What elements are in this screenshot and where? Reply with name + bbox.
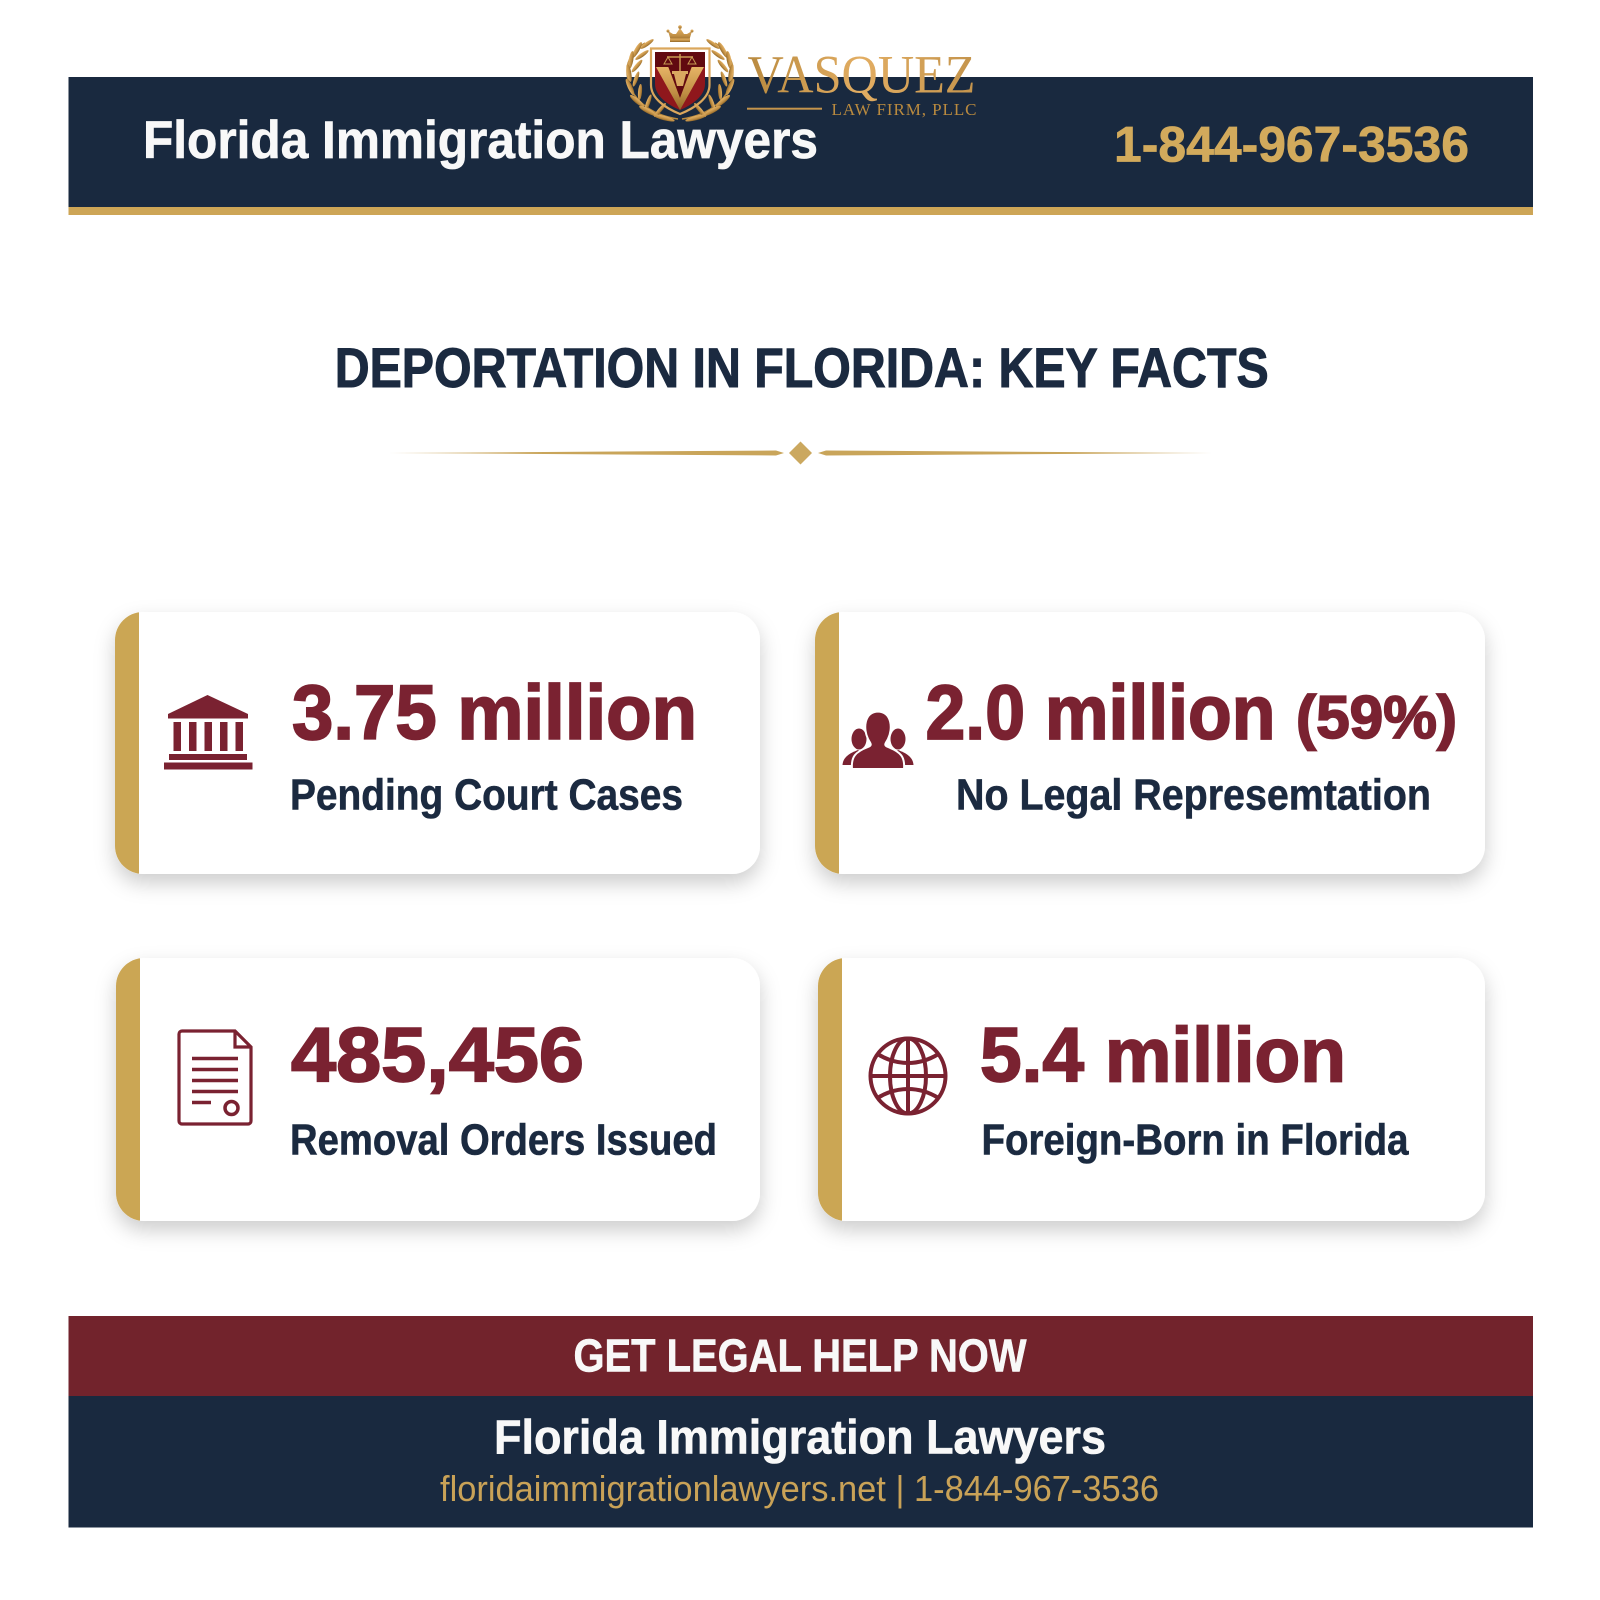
- call-to-action banner: [68, 1316, 1533, 1396]
- logo sub-line: LAW FIRM, PLLC: [832, 100, 976, 119]
- logo rule: [747, 108, 822, 110]
- call-to-action text: GET LEGAL HELP NOW: [574, 1330, 1027, 1382]
- header banner: [68, 77, 1533, 215]
- logo right laurel: [682, 38, 736, 123]
- icon: courthouse: [164, 695, 252, 770]
- panel: no legal representation: [815, 612, 1485, 874]
- logo crown: [666, 25, 694, 42]
- label: removal orders issued: Removal Orders Issued: [290, 1116, 717, 1164]
- label: pending court cases: Pending Court Cases: [290, 770, 683, 820]
- label: no legal representation: No Legal Represemtation: [956, 770, 1431, 820]
- header firm name: Florida Immigration Lawyers: [143, 111, 818, 170]
- main title: DEPORTATION IN FLORIDA: KEY FACTS: [335, 336, 1269, 399]
- panel: foreign-born in Florida: [818, 958, 1485, 1221]
- stat: 59 percent: (59%): [1296, 684, 1457, 751]
- logo: Vasquez Law Firm: [624, 25, 976, 123]
- logo shield: [651, 48, 710, 114]
- panel: removal orders issued: [116, 958, 760, 1221]
- logo left laurel: [624, 38, 678, 123]
- label: foreign-born in Florida: Foreign-Born in Florida: [982, 1116, 1409, 1164]
- footer firm name: Florida Immigration Lawyers: [494, 1412, 1106, 1464]
- footer panel: [68, 1396, 1533, 1528]
- logo wordmark: VASQUEZ: [748, 45, 976, 105]
- header phone number: 1-844-967-3536: [1114, 116, 1469, 172]
- title divider with diamond: [389, 442, 1212, 464]
- stat: 5.4 million: 5.4 million: [980, 1012, 1346, 1098]
- icon: document: [179, 1031, 251, 1124]
- stat: 3.75 million: 3.75 million: [292, 670, 697, 756]
- panel: pending court cases: [115, 612, 760, 874]
- stat: 2.0 million: 2.0 million: [926, 670, 1276, 756]
- icon: globe: [870, 1038, 946, 1114]
- icon: people: [842, 712, 914, 769]
- footer contact line: floridaimmigrationlawyers.net | 1-844-967-3536: [440, 1468, 1159, 1509]
- stat: 485,456: 485,456: [291, 1012, 584, 1098]
